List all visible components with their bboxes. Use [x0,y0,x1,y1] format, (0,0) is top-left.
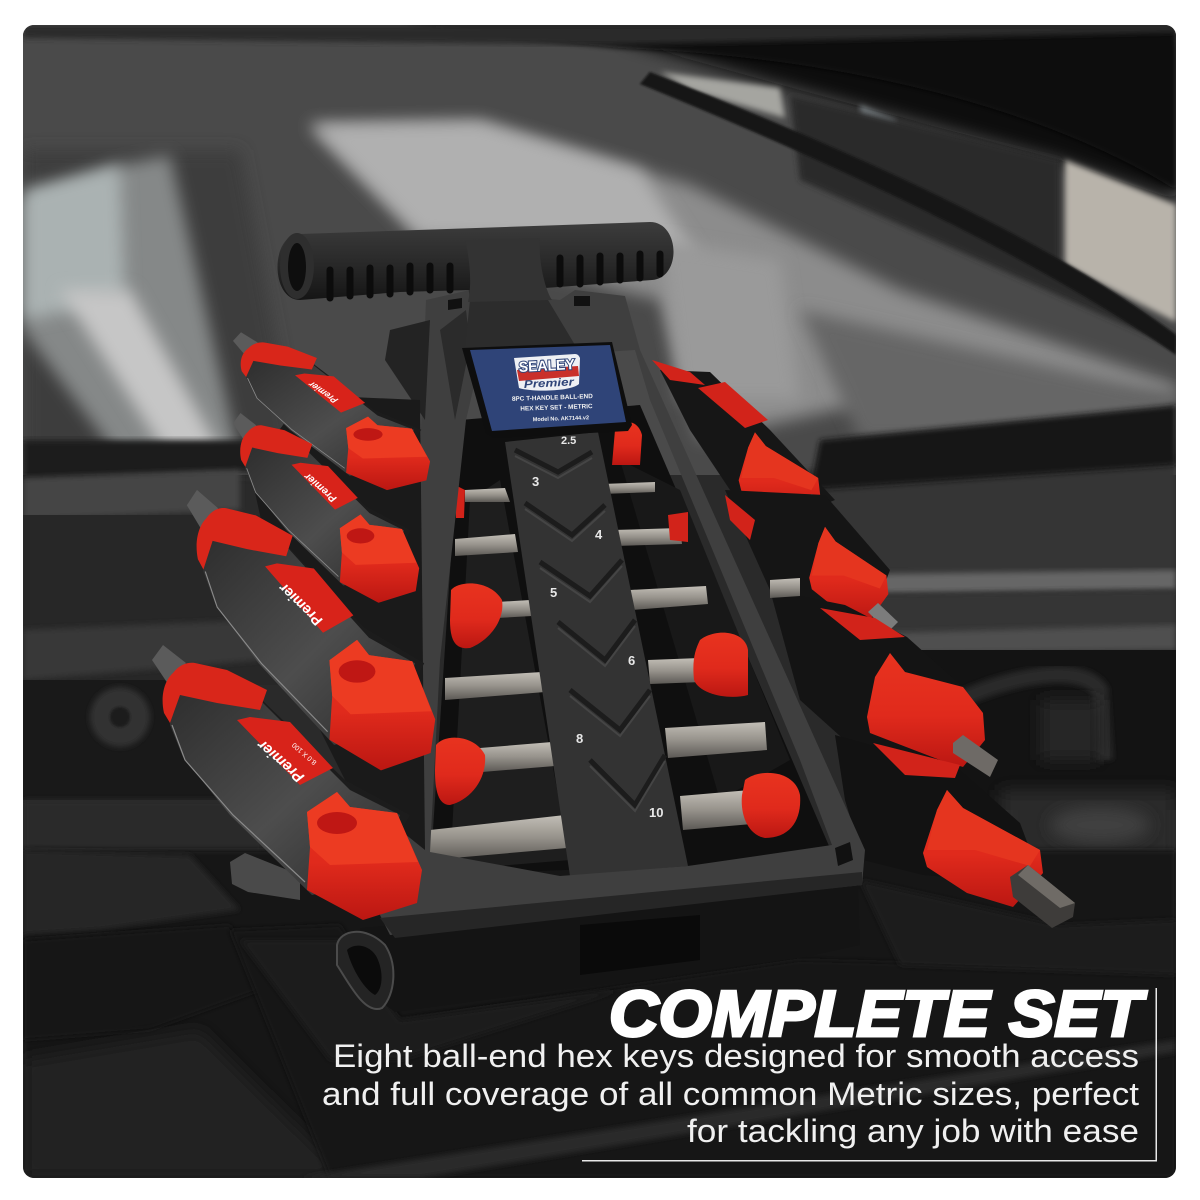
stand: product label [462,342,632,438]
background: windscreen and interior [23,25,1176,475]
body text: and full coverage of all common Metric sizes, perfect [322,1076,1139,1112]
right handle: 4 key [725,490,898,628]
hex key set: right handles [652,360,1075,928]
size numbers: 2.5 [561,435,576,447]
size numbers [532,435,663,820]
hex key stand: inner dark rack [430,405,835,875]
stand: steel hex rods [430,482,800,860]
left handles: shadow mass behind bodies [250,395,425,850]
size numbers: 10 [649,805,663,820]
left handle: 8 key: 8.0 X 100 [291,741,318,766]
label: product name: 8PC T-HANDLE BALL-END [512,393,593,403]
hex key stand: bottom roller [336,915,700,1010]
hex key set: left handles [152,332,435,920]
background: engine cover [23,800,1176,1180]
stand: A-frame [380,290,865,938]
left handle: 2.5 key [233,332,430,490]
left handle: 8 key: Premier [253,736,308,786]
size numbers: 4 [595,527,603,542]
stand: centre strap with size numbers [505,432,688,876]
stand foot peg [230,853,300,900]
size numbers: 6 [628,653,635,668]
left handle: 5 key: Premier [276,578,325,629]
left handle: 5 key [187,490,435,770]
size numbers: 5 [550,585,557,600]
size numbers: 8 [576,731,583,746]
body text: Eight ball-end hex keys designed for smooth access [333,1038,1139,1074]
left handle: 3 key: Premier [302,470,339,504]
left handle: 8 key [152,645,422,920]
title: COMPLETE SET [609,977,1148,1050]
label: SEALEY Premier logo: Premier [524,376,575,391]
body text: for tackling any job with ease [687,1113,1139,1149]
size numbers: 3 [532,474,539,489]
label: product name [512,394,592,422]
left handle: 2.5 key: Premier [306,380,340,405]
body text [322,1038,1139,1149]
right handle: 6 key [770,590,998,777]
caption frame lines [582,988,1157,1162]
label: SEALEY Premier logo [514,354,580,391]
stand: T-handle grip [278,222,674,348]
background: dashboard and scuttle panels [23,405,1176,910]
right handle: 2.5/3 key [652,360,835,502]
right handle: 8 key [835,735,1075,928]
left handle: 3 key [233,413,419,603]
label: SEALEY Premier logo: SEALEY [518,357,575,376]
label: product name: HEX KEY SET - METRIC [520,403,593,413]
stand: red ball caps [435,422,800,838]
label: product name: Model No. AK7144.v2 [533,415,589,423]
